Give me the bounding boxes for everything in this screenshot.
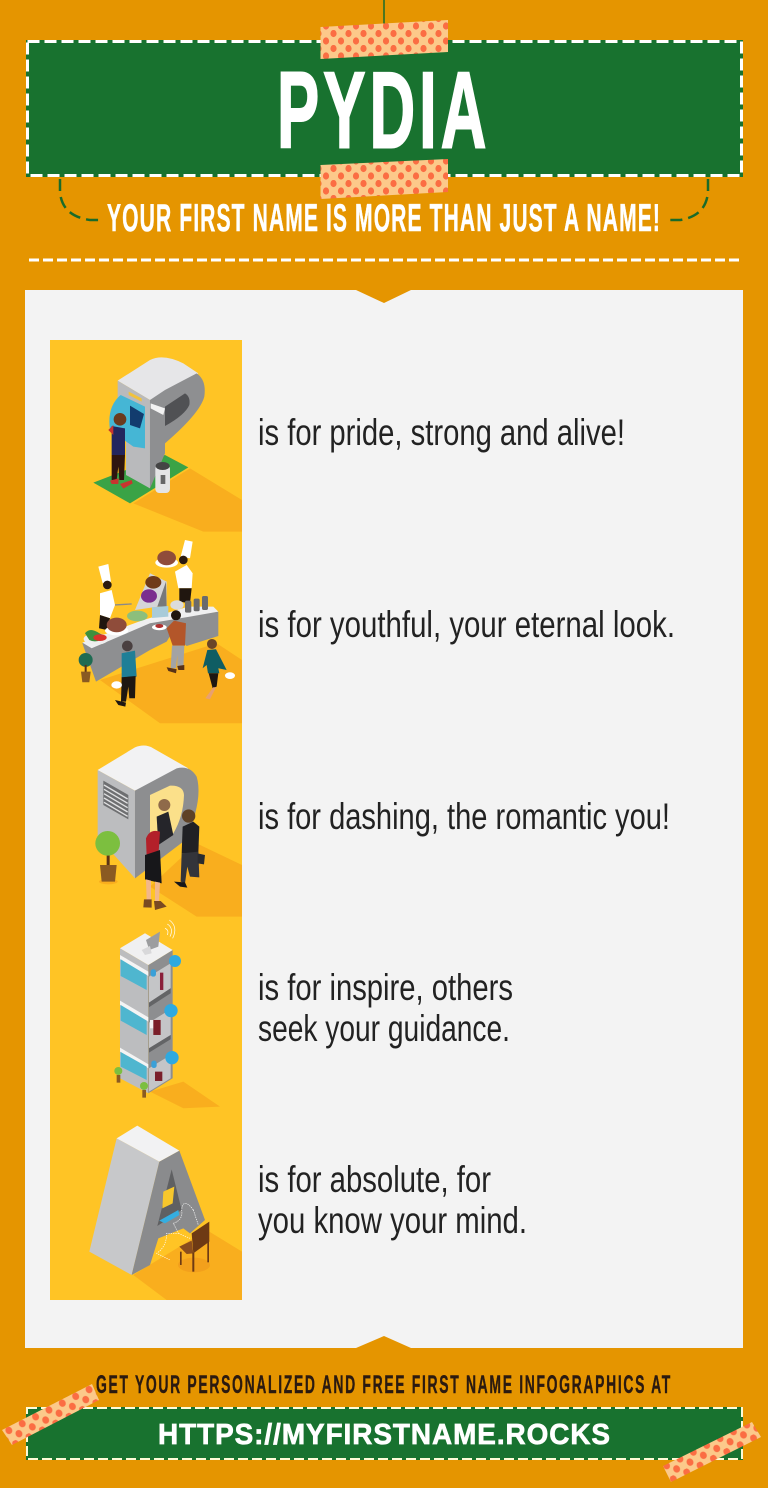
text: P: is for pride, strong and alive! (258, 412, 625, 453)
illustration: A desk (89, 1126, 242, 1300)
illustration: P cash machine (93, 357, 242, 532)
text: I (258, 967, 513, 1049)
footer url: HTTPS://MYFIRSTNAME.ROCKS (158, 1419, 611, 1451)
text: I: seek your guidance. (258, 1008, 510, 1049)
text: A: is for absolute, for (258, 1159, 491, 1200)
title banner (26, 40, 743, 177)
tape: bottom (320, 159, 448, 199)
text: A: you know your mind. (258, 1200, 527, 1241)
text: I: is for inspire, others (258, 967, 513, 1008)
tape: top (320, 20, 448, 59)
header string (383, 0, 385, 24)
text: Y: is for youthful, your eternal look. (258, 604, 675, 645)
text: A (258, 1159, 527, 1241)
bracket: right (668, 179, 708, 220)
bracket: left (60, 179, 104, 220)
footer banner (26, 1407, 743, 1460)
tape: footer left (2, 1384, 99, 1445)
panel: paper sheet (25, 290, 743, 1348)
illustration: I tower (114, 920, 220, 1108)
title: PYDIA (277, 48, 491, 171)
illustration: D doorway (95, 746, 242, 917)
yellow illustration column (50, 340, 242, 1300)
illustration: Y buffet counter (79, 540, 242, 723)
text: D: is for dashing, the romantic you! (258, 796, 670, 837)
tape: footer right (663, 1422, 761, 1482)
